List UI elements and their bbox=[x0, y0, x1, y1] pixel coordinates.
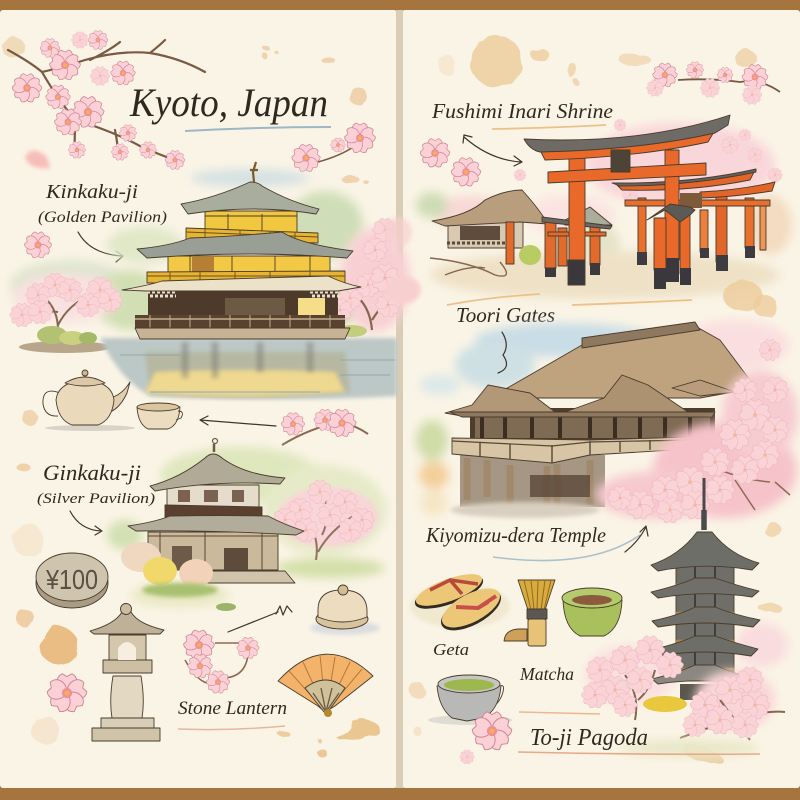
spire bbox=[702, 478, 706, 530]
small branch with blossoms bbox=[182, 630, 260, 695]
panel: left notebook page bbox=[0, 10, 397, 788]
panel: right notebook page bbox=[402, 10, 800, 788]
ground level bbox=[148, 532, 278, 570]
first level gold wall bbox=[168, 256, 330, 282]
underline bbox=[178, 726, 285, 730]
blossom bbox=[23, 232, 53, 260]
pond bbox=[100, 338, 397, 399]
lower roofs bbox=[445, 385, 555, 416]
folding fan bbox=[278, 654, 373, 717]
upper level bbox=[167, 485, 259, 507]
To-ji Pagoda label: To-ji Pagoda bbox=[530, 725, 648, 751]
lower roof bbox=[128, 516, 304, 535]
shrine building bbox=[432, 190, 612, 248]
cherry tree right bbox=[327, 218, 410, 337]
front small torii pillars bbox=[647, 204, 695, 289]
blossom branch near arrow bbox=[280, 409, 368, 445]
sky wash bbox=[416, 323, 655, 516]
green ground wash bbox=[620, 739, 760, 757]
covered dish bbox=[310, 585, 380, 635]
first balcony bbox=[147, 271, 345, 283]
Matcha label: Matcha bbox=[519, 664, 574, 684]
stains left page middle bbox=[13, 411, 78, 744]
Geta label: Geta bbox=[433, 640, 469, 659]
pink wash bbox=[416, 123, 792, 270]
Kiyomizu-dera Temple label: Kiyomizu-dera Temple bbox=[425, 523, 606, 547]
garden foliage bbox=[107, 447, 387, 607]
Kinkaku-ji label: Kinkaku-ji bbox=[45, 181, 138, 203]
small tree bbox=[519, 245, 541, 265]
road lines and Toori Gates label underline bbox=[447, 294, 692, 305]
double arrow to torii bbox=[463, 135, 522, 166]
golden pavilion Kinkaku-ji bbox=[122, 162, 361, 339]
Ginkaku-ji label: (Silver Pavilion) bbox=[37, 491, 155, 507]
page gutter bbox=[396, 10, 403, 788]
ground floor bbox=[148, 289, 338, 323]
large blossom bbox=[471, 712, 513, 752]
bottom underline of To-ji label bbox=[518, 752, 760, 754]
arrow to Kinkaku-ji bbox=[78, 232, 123, 262]
stain at branch start bbox=[2, 36, 24, 58]
blossom branch top right of left page bbox=[291, 123, 377, 173]
tiers bbox=[676, 565, 734, 681]
grey matcha cup bbox=[428, 675, 512, 725]
small blossoms bbox=[419, 139, 482, 188]
cherry tree bottom right of pagoda bbox=[680, 667, 785, 740]
main roof bbox=[490, 326, 756, 398]
walls bbox=[470, 408, 715, 448]
cherry tree bbox=[272, 480, 378, 560]
coin ¥100 bbox=[36, 553, 108, 608]
Ginkaku-ji label: Ginkaku-ji bbox=[43, 460, 141, 485]
base bbox=[135, 328, 350, 339]
steps bbox=[205, 571, 295, 583]
stain beside fan bbox=[278, 719, 380, 757]
title: Kyoto, Japan bbox=[129, 80, 328, 125]
distant torii bbox=[612, 169, 775, 271]
main torii gate bbox=[524, 115, 730, 285]
title underline bbox=[185, 127, 331, 131]
pen arrow bbox=[498, 332, 507, 373]
second roof bbox=[137, 232, 353, 258]
arrow to Ginkaku-ji bbox=[70, 511, 102, 535]
cherry right cloud behind bbox=[680, 320, 790, 370]
Kinkaku-ji label bbox=[38, 181, 167, 226]
roof five bbox=[652, 665, 745, 685]
teapot bbox=[43, 370, 135, 431]
curved arrow up to canopy bbox=[493, 526, 648, 561]
silver pavilion Ginkaku-ji bbox=[107, 438, 387, 611]
lower eave bbox=[122, 276, 361, 291]
cherry tree left bbox=[9, 273, 123, 330]
north arrow bbox=[228, 606, 292, 632]
small left torii bbox=[506, 217, 612, 277]
roof three bbox=[652, 607, 760, 627]
shrubs bbox=[121, 542, 161, 572]
finial bbox=[250, 162, 258, 182]
top balcony bbox=[186, 228, 318, 243]
top roof bbox=[181, 182, 319, 214]
roof two bbox=[651, 578, 759, 598]
roof one bbox=[651, 532, 759, 571]
bamboo whisk bbox=[504, 580, 555, 646]
second level gold wall bbox=[205, 211, 297, 237]
branch with buds bbox=[430, 258, 506, 276]
Stone Lantern label: Stone Lantern bbox=[178, 699, 287, 719]
blossom branch right page top bbox=[646, 62, 780, 106]
cherry trees around pagoda back bbox=[585, 623, 788, 705]
stains bottom right page bbox=[409, 682, 723, 766]
stain by pagoda bbox=[758, 522, 782, 612]
deck railing bbox=[135, 315, 345, 328]
island with shrubs bbox=[19, 326, 111, 353]
roof four bbox=[651, 636, 758, 656]
underframe bbox=[460, 455, 605, 507]
stains near title bbox=[263, 45, 368, 184]
arrow to tea set bbox=[200, 416, 276, 426]
cherry tree bottom left of pagoda bbox=[580, 636, 685, 720]
Fushimi Inari torii scene bbox=[416, 115, 792, 299]
ground wash bbox=[430, 251, 780, 299]
label underline bbox=[492, 125, 606, 129]
coin ¥100: ¥100 bbox=[45, 564, 98, 595]
Fushimi Inari Shrine label: Fushimi Inari Shrine bbox=[431, 99, 613, 123]
stone lantern bbox=[90, 604, 164, 741]
yellow shrub bbox=[643, 696, 687, 712]
ground bbox=[450, 502, 600, 518]
pink blossoms at left edge of right page bbox=[384, 217, 421, 304]
Kinkaku-ji label: (Golden Pavilion) bbox=[38, 209, 167, 226]
pink speckles bbox=[513, 119, 783, 203]
upper roof bbox=[150, 454, 285, 491]
large cherry blossom canopy bbox=[596, 339, 798, 525]
background foliage around golden pavilion bbox=[10, 169, 363, 330]
Kiyomizu-dera temple scene bbox=[416, 320, 790, 518]
blossom beside lantern bbox=[46, 674, 88, 714]
balcony bbox=[452, 437, 690, 463]
Toori Gates label: Toori Gates bbox=[456, 303, 555, 327]
stains right page top bbox=[438, 35, 756, 87]
geta sandals bbox=[410, 568, 510, 639]
tea cup bbox=[137, 403, 182, 429]
small blossom bbox=[459, 750, 475, 765]
cherry branch top left bbox=[8, 30, 205, 171]
top underline of To-ji label bbox=[519, 712, 600, 714]
Ginkaku-ji label bbox=[37, 460, 155, 507]
stain near gates bbox=[723, 281, 777, 317]
green matcha bowl bbox=[562, 588, 622, 636]
To-ji pagoda bbox=[651, 478, 760, 700]
